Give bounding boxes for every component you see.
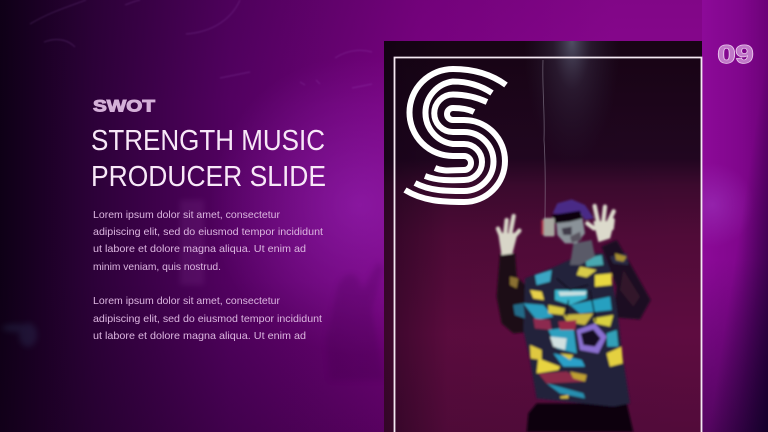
body paragraph 1 bbox=[93, 209, 323, 273]
body paragraph 1: minim veniam, quis nostrud. bbox=[93, 261, 221, 273]
performer photo bbox=[497, 199, 651, 432]
body paragraph 1: ut labore et dolore magna aliqua. Ut enim ad bbox=[93, 243, 306, 255]
body paragraph 2: adipiscing elit, sed do eiusmod tempor incididunt bbox=[93, 313, 322, 325]
S logo bbox=[405, 69, 506, 202]
page number: 09 bbox=[718, 41, 754, 69]
drawstrings bbox=[557, 278, 596, 322]
swot label: SWOT bbox=[93, 96, 156, 116]
photo panel bbox=[384, 41, 702, 432]
right arm bbox=[602, 240, 651, 319]
sunglasses bbox=[552, 211, 583, 223]
trousers bbox=[527, 403, 633, 432]
hair bbox=[553, 199, 594, 220]
body paragraph 1: adipiscing elit, sed do eiusmod tempor incididunt bbox=[93, 226, 323, 238]
left arm bbox=[497, 253, 532, 333]
right side panel bbox=[702, 0, 768, 432]
title: STRENGTH MUSIC bbox=[91, 125, 325, 157]
photo frame bbox=[394, 58, 702, 432]
hoodie body bbox=[523, 253, 630, 407]
body paragraph 2 bbox=[93, 295, 322, 342]
left hand bbox=[498, 216, 519, 253]
head bbox=[556, 213, 585, 243]
neck bbox=[570, 240, 595, 265]
body paragraph 1: Lorem ipsum dolor sit amet, consectetur bbox=[93, 209, 280, 221]
microphone bbox=[543, 218, 555, 236]
body paragraph 2: ut labore et dolore magna aliqua. Ut enim ad bbox=[93, 330, 306, 342]
right hand bbox=[587, 206, 614, 239]
title: PRODUCER SLIDE bbox=[91, 161, 326, 193]
body paragraph 2: Lorem ipsum dolor sit amet, consectetur bbox=[93, 295, 280, 307]
microphone cable bbox=[543, 60, 545, 222]
title bbox=[91, 125, 326, 193]
hoodie colour patches bbox=[510, 253, 640, 398]
